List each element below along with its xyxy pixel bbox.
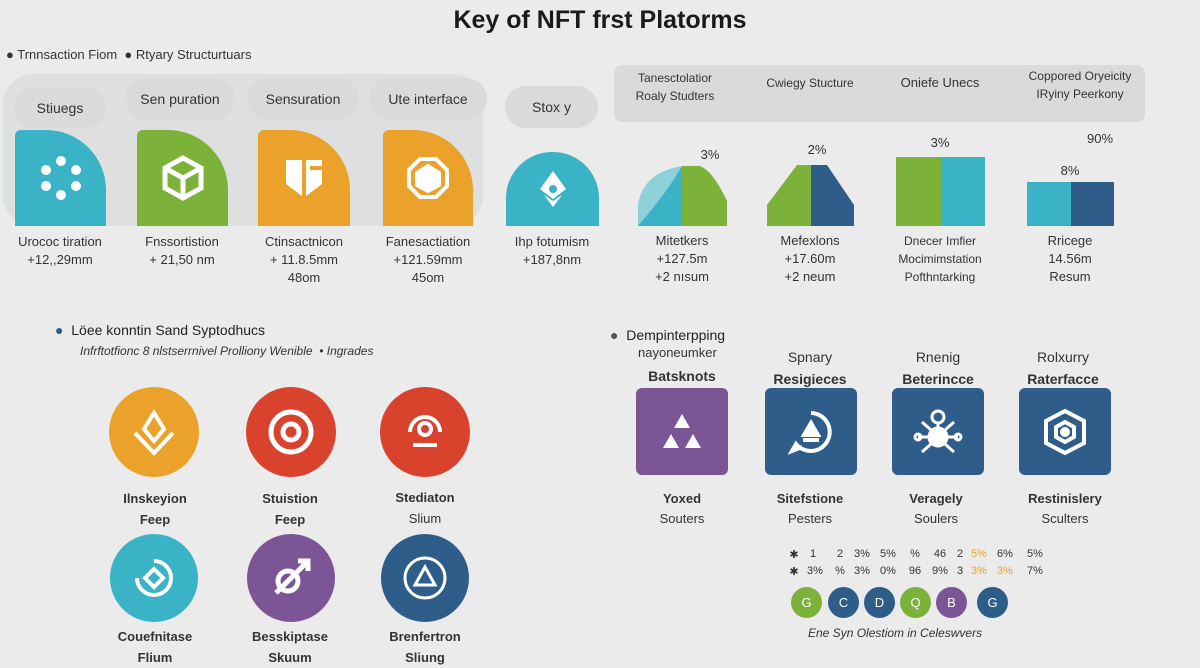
text: Sliung [405,650,445,665]
text: Raterfacce [1027,371,1099,387]
shape: orange 2 [383,130,473,226]
legend: letter circles [791,587,1008,618]
legend: letter circles: G [801,595,812,610]
text: Ihp fotumism [515,234,589,249]
text: Feep [140,512,170,527]
text: Veragely [909,491,963,506]
chart: bars: 3% [701,147,719,162]
title: Key of NFT frst Platorms [453,6,747,34]
text: Sculters [1042,511,1088,526]
labels: left items: Urococ tiration [18,234,102,249]
labels: squares: Yoxed [663,491,701,506]
text: +121.59mm [393,252,462,267]
text: Dnecer Imfier [904,234,976,248]
text: Sitefstione [777,491,843,506]
chart: bars: 90% [1087,131,1113,146]
pill: Stoxy [505,86,598,128]
text: Flium [138,650,172,665]
text: 48om [288,270,320,285]
chart: bars [638,131,1114,226]
table: numbers: 5% [1027,548,1043,560]
text: Ilnskeyion [123,491,187,506]
text: Oniefe Unecs [901,75,979,90]
text: Cwiegy Stucture [766,76,854,90]
labels: right charts [655,233,709,284]
text: Rolxurry [1037,349,1089,365]
text: Coppored Oryeicity [1029,69,1131,83]
icons: circles row 1 [109,387,199,477]
table: numbers: 3% [854,565,870,577]
shape: teal dome [506,152,599,226]
pill: Sen puration [125,78,235,120]
table: numbers: 0% [880,565,896,577]
shape: orange 1 [258,130,350,226]
text: Fnssortistion [145,234,219,249]
text: Soulers [914,511,958,526]
text: 14.56m [1048,251,1092,266]
text: 45om [412,270,444,285]
table: numbers: 3% [854,548,870,560]
table: numbers: 3 [957,565,963,577]
text: Rricege [1048,233,1092,248]
text: Beterincce [902,371,974,387]
pill: Stiuegs: Stiuegs [37,100,83,116]
icons: circles row 2 [110,534,198,622]
text: Resigieces [773,371,847,387]
panel: right header [614,65,1145,122]
table: numbers: 5% [880,548,896,560]
chart: bars: 2% [808,142,826,157]
shape: teal [15,130,106,226]
table: numbers: 96 [909,565,921,577]
legend: letter circles: D [875,595,884,610]
table: numbers: % [910,548,920,560]
icons: squares [636,388,728,475]
pill: Ute interface [369,78,487,120]
text: Resum [1049,269,1091,284]
table: numbers [789,548,1043,578]
table: numbers: % [835,565,845,577]
table: numbers: 7% [1027,565,1043,577]
legend: letter circles: C [839,595,848,610]
text: Besskiptase [252,629,328,644]
text: Stediaton [395,490,455,505]
text: Stuistion [262,491,318,506]
text: +17.60m [785,251,835,266]
table: numbers: 5% [971,548,987,560]
chart: bars: 3% [931,135,949,150]
text: Batsknots [648,368,716,384]
table: numbers: 2 [837,548,843,560]
text: Skuum [268,650,312,665]
text: Spnary [788,349,832,365]
labels: right charts: +127.5m [657,251,707,266]
text: Couefnitase [118,629,192,644]
labels: left items [18,234,102,267]
text: Mocimimstation [898,252,982,266]
text: Mefexlons [780,233,840,248]
table: numbers: ✱ [789,549,799,561]
text: Tanesctolatior [638,71,712,85]
text: Infrftotfionc 8 nlstserrnivel Prolliony Wenible • Ingrades [80,344,373,358]
heading: bottom left: ● Löee konntin Sand Syptodhucs [55,322,265,338]
text: Roaly Studters [636,89,714,103]
shape: green [137,130,228,226]
text: Brenfertron [389,629,461,644]
text: +187,8nm [523,252,581,267]
text: + 21,50 nm [149,252,215,267]
table: numbers: 2 [957,548,963,560]
legend: letter circles: G [987,595,998,610]
labels: right charts: +2 nısum [655,269,709,284]
pill: Sen puration: Sen puration [140,91,220,107]
text: Pesters [788,511,832,526]
text: IRyiny Peerkony [1036,87,1124,101]
legend: ● Trnnsaction Fiom ● Rtyary Structurtuars [6,47,251,62]
text: Fanesactiation [386,234,470,249]
text: nayoneumker [638,345,717,360]
text: Feep [275,512,305,527]
table: numbers: 6% [997,548,1013,560]
legend: letter circles: B [947,595,956,610]
text: Restinislery [1028,491,1102,506]
pill: Sensuration: Sensuration [266,91,340,107]
caption: Ene Syn Olestiom in Celeswvers [808,626,982,640]
pill: Stiuegs [14,88,106,128]
table: numbers: 3% [997,565,1013,577]
table: numbers: 46 [934,548,946,560]
table: numbers: 3% [807,565,823,577]
heading: bottom right: ● Dempinterpping [610,327,725,343]
text: + 11.8.5mm [270,252,338,267]
text: Slium [409,511,441,526]
legend: letter circles: Q [910,595,921,610]
chart: bars: 8% [1061,163,1079,178]
labels: squares [660,491,704,526]
table: numbers: 3% [971,565,987,577]
text: Ctinsactnicon [265,234,343,249]
table: numbers: ✱ [789,566,799,578]
pill: Ute interface: Ute interface [388,91,468,107]
labels: squares: Souters [660,511,704,526]
text: +2 neum [785,269,835,284]
labels: left items: +12,,29mm [27,252,93,267]
table: numbers: 9% [932,565,948,577]
table: numbers: 1 [810,548,816,560]
text: Pofthntarking [905,270,975,284]
panel: left background [3,74,483,226]
pill: Sensuration [247,78,359,120]
labels: right charts: Mitetkers [656,233,708,248]
text: Rnenig [916,349,960,365]
pill: Stoxy: Stox y [532,99,571,115]
